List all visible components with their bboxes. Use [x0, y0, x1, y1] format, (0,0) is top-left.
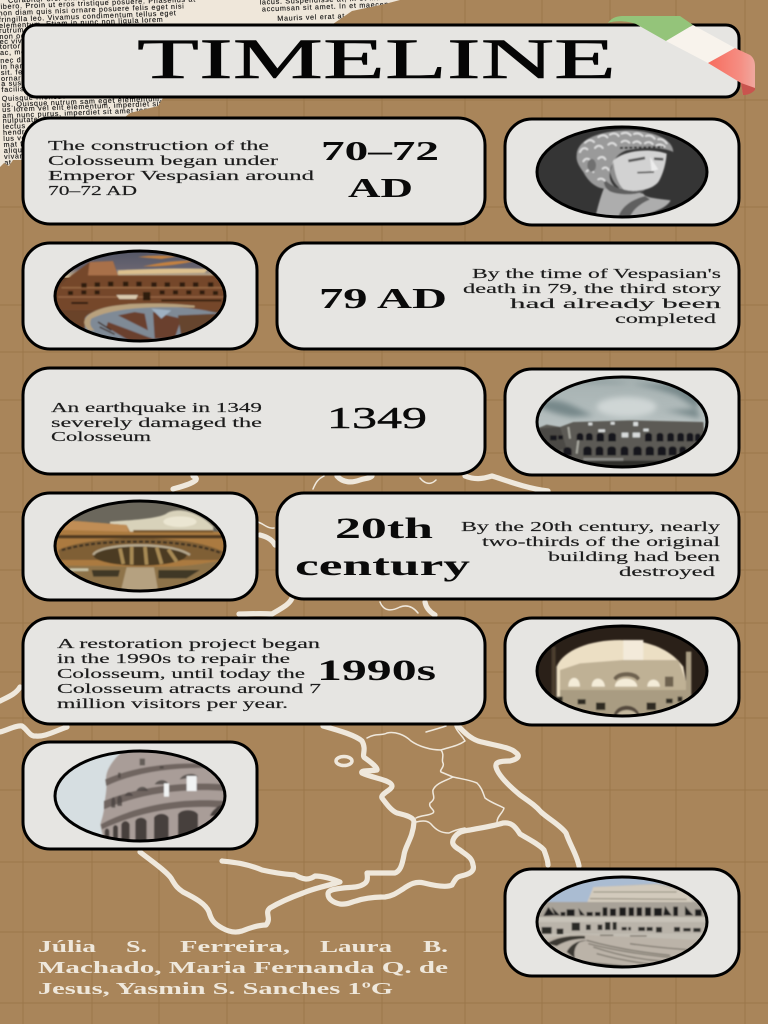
newspaper clipping: am nunc purus, imperdiet sit amet tempor nunc	[2, 104, 184, 120]
author credits	[38, 937, 449, 998]
newspaper clipping: non diam quis nisi ornare posuere felis eget nisi	[0, 1, 185, 18]
text: earthquake: Colosseum	[51, 430, 151, 445]
photo card: colosseum interior at dusk	[23, 243, 257, 349]
event row 5: 1990s	[23, 618, 485, 724]
newspaper clipping: us. Quisque nutrum sam eget elementum, at pellen	[2, 92, 199, 109]
text: destruction: destroyed	[619, 565, 715, 580]
date: 1990s: 1990s	[317, 654, 436, 687]
newspaper clipping: vivam	[4, 151, 26, 161]
newspaper clipping: a susp	[1, 78, 27, 88]
newspaper clipping: sit. ferm	[1, 67, 33, 77]
newspaper clipping: elementum. Etiam in nunc non ligula lorem	[0, 15, 164, 30]
newspaper clipping: Quisque rhoncus nutrum sam eget at	[2, 89, 144, 103]
title card	[23, 25, 739, 97]
author credits: Ferreira,	[180, 937, 290, 956]
event row 1: 70-72 AD	[23, 118, 485, 224]
italy map outline	[0, 476, 579, 932]
text: restoration: Colosseum, until today the	[57, 667, 305, 682]
newspaper clipping: facilisi	[1, 84, 27, 94]
event row 3: 1349	[23, 368, 485, 474]
newspaper clipping: nec dui	[0, 55, 29, 65]
newspaper clipping	[0, 0, 420, 170]
photo card: colosseum ruins	[505, 869, 739, 976]
text: restoration	[57, 637, 321, 712]
text: earthquake	[51, 401, 262, 445]
newspaper clipping: tortor ag	[0, 41, 33, 51]
newspaper clipping: lus vel	[3, 133, 29, 143]
text: restoration: in the 1990s to repair the	[57, 652, 290, 667]
date: 79 AD: 79 AD	[319, 284, 447, 315]
text: restoration: A restoration project began	[57, 637, 320, 652]
date: 70-72 AD	[321, 136, 439, 203]
text: construction: Emperor Vespasian around	[48, 169, 314, 184]
text: Vespasian's death	[463, 267, 721, 327]
newspaper clipping: ac, mole	[0, 47, 33, 57]
text: destruction	[461, 520, 720, 580]
newspaper clipping: non odio.	[0, 31, 35, 41]
text: destruction: two-thirds of the original	[482, 535, 720, 550]
text: restoration: Colosseum atracts around 7	[57, 682, 321, 697]
photo card: colosseum exterior	[23, 742, 257, 849]
newspaper clipping: aliquam	[4, 145, 34, 155]
text: Vespasian's death: death in 79, the third story	[463, 282, 721, 297]
newspaper clipping: mat fe	[3, 139, 28, 149]
text: Vespasian's death: By the time of Vespasian's	[472, 267, 721, 282]
text: Vespasian's death: had already been	[510, 297, 721, 312]
newspaper clipping: lectus	[3, 121, 26, 131]
author credits: Laura	[320, 937, 393, 956]
newspaper clipping: hendrerit	[3, 127, 38, 137]
date: 20th century	[295, 512, 470, 582]
newspaper clipping: Mauris vel erat at	[277, 11, 345, 23]
author credits: S.	[126, 937, 147, 956]
italian flag ribbon	[608, 16, 755, 95]
photo card: colosseum arena with clouds	[23, 493, 257, 600]
newspaper clipping: us lorem vel elit elementum, imperdiet sit amet temp	[2, 97, 205, 114]
text: construction: Colosseum began under	[48, 154, 279, 169]
newspaper clipping: nulputate	[2, 115, 39, 125]
text: earthquake: severely damaged the	[51, 416, 262, 431]
newspaper clipping: at	[4, 158, 12, 167]
photo card: marble bust	[505, 119, 739, 225]
text: construction: 70–72 AD	[48, 184, 137, 199]
date: 20th century: 20th	[335, 512, 434, 545]
date: 1349: 1349	[327, 400, 427, 435]
text: restoration: million visitors per year.	[57, 697, 288, 712]
text: destruction: building had been	[548, 550, 720, 565]
date: 70-72 AD: 70–72	[321, 136, 439, 166]
author credits: Machado, Maria Fernanda Q. de	[38, 958, 449, 977]
text: construction	[48, 139, 314, 199]
author credits: Jesus, Yasmin S. Sanches 1ºG	[38, 979, 393, 998]
text: earthquake: An earthquake in 1349	[51, 401, 262, 416]
photo card: sepia arches	[505, 618, 739, 725]
newspaper clipping: in hand	[0, 61, 29, 71]
author credits: Júlia	[38, 937, 97, 956]
newspaper clipping: ec vivera	[0, 36, 35, 46]
text: Vespasian's death: completed	[615, 312, 716, 327]
newspaper clipping: fringilla leo. Vivamus condimentum tellus eget	[0, 8, 177, 24]
event row 4: 20th century	[277, 493, 739, 599]
photo card: colosseum under grey sky	[505, 369, 739, 475]
text: destruction: By the 20th century, nearly	[461, 520, 720, 535]
text: construction: The construction of the	[48, 139, 269, 154]
event row 2: 79 AD	[277, 243, 739, 349]
newspaper clipping: ornaren	[1, 73, 31, 83]
title: TIMELINE	[137, 28, 616, 91]
date: 20th century: century	[295, 549, 470, 582]
date: 70-72 AD: AD	[348, 173, 413, 203]
author credits: B.	[423, 937, 448, 956]
